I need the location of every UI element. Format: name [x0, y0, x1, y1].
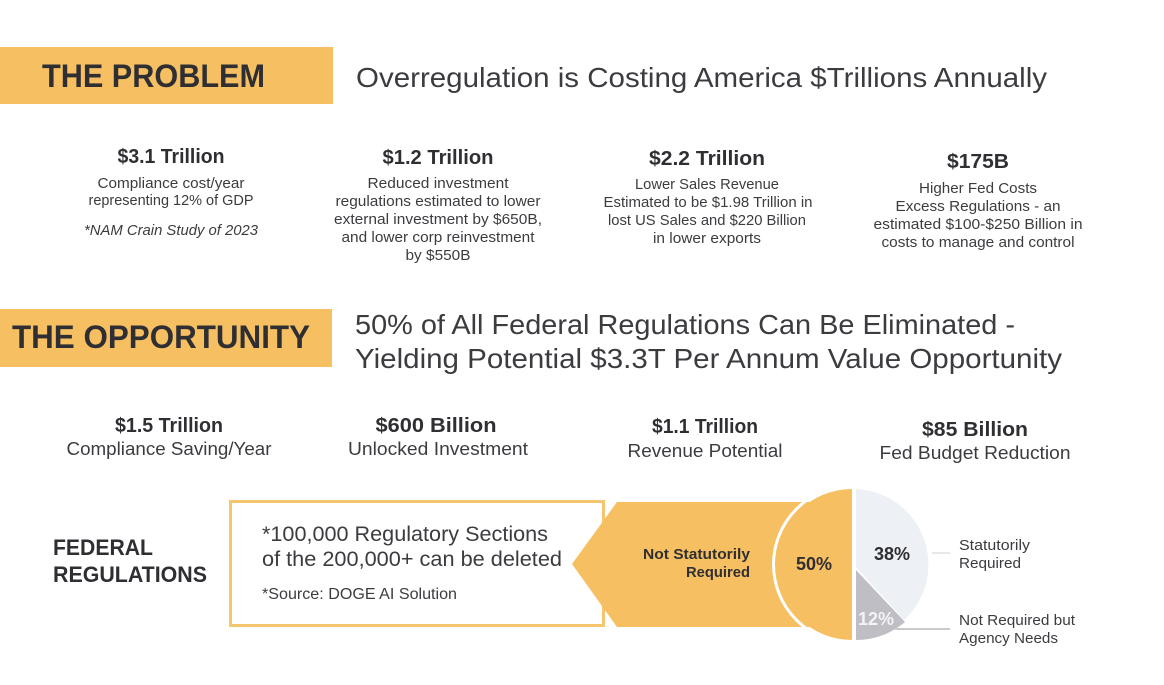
- stat: 2.2 trillion: Estimated to be $1.98 Trillion in: [604, 195, 812, 211]
- legend: statutorily required: [932, 538, 1031, 572]
- stat: unlocked investment: $600 Billion: [376, 415, 496, 437]
- arrow: not statutorily required: Not Statutorily: [643, 547, 750, 563]
- stat: 3.1 trillion: *NAM Crain Study of 2023: [84, 223, 258, 239]
- pie slice: 38 percent: [856, 489, 928, 620]
- arrow: not statutorily required: [572, 502, 810, 627]
- callout: regulatory sections: *Source: DOGE AI Solution: [262, 586, 457, 603]
- stat: revenue potential: $1.1 Trillion: [652, 416, 758, 438]
- stat: revenue potential: [628, 416, 782, 461]
- stat: compliance saving: [66, 415, 272, 459]
- banner: the opportunity: [0, 309, 332, 367]
- stat: 3.1 trillion: representing 12% of GDP: [88, 193, 254, 209]
- panel: opportunity statistics: [66, 415, 1070, 463]
- heading: opportunity: 50% of All Federal Regulations Can Be Eliminated -: [355, 309, 1015, 340]
- callout: regulatory sections: *100,000 Regulatory Sections: [262, 523, 548, 546]
- pie slice: 50 percent: 50%: [796, 554, 832, 574]
- pie slice: 12 percent: 12%: [858, 609, 894, 629]
- stat: fed budget reduction: Fed Budget Reduction: [880, 443, 1070, 463]
- stat: 1.2 trillion: [334, 147, 542, 264]
- heading: overregulation: Overregulation is Costing America $Trillions Annually: [356, 62, 1047, 93]
- stat: 3.1 trillion: $3.1 Trillion: [118, 146, 224, 168]
- callout: regulatory sections: of the 200,000+ can be deleted: [262, 548, 562, 571]
- stat: 1.2 trillion: by $550B: [406, 248, 470, 264]
- pie chart: regulation breakdown: [774, 486, 928, 643]
- stat: 2.2 trillion: lost US Sales and $220 Billion: [608, 213, 806, 229]
- callout: regulatory sections: [230, 502, 604, 626]
- stat: 2.2 trillion: [604, 148, 812, 247]
- heading: opportunity: [355, 309, 1062, 374]
- stat: 3.1 trillion: [84, 146, 258, 239]
- stat: compliance saving: Compliance Saving/Year: [66, 439, 272, 459]
- heading: federal regulations: REGULATIONS: [53, 562, 207, 587]
- banner: the opportunity: THE OPPORTUNITY: [12, 319, 310, 355]
- legend: not required but agency needs: [895, 613, 1075, 647]
- stat: 1.2 trillion: regulations estimated to lower: [336, 194, 541, 210]
- panel: problem statistics: [84, 146, 1082, 264]
- arrow: not statutorily required: Required: [686, 565, 750, 581]
- banner: the problem: [0, 47, 333, 104]
- panel: the opportunity header: [0, 309, 1062, 374]
- stat: 175B: estimated $100-$250 Billion in: [874, 217, 1082, 233]
- panel: the problem header: [0, 47, 1047, 104]
- pie slice: 12 percent: [856, 570, 905, 640]
- stat: unlocked investment: Unlocked Investment: [348, 439, 528, 459]
- heading: federal regulations: [53, 535, 207, 587]
- stat: 175B: $175B: [947, 151, 1009, 173]
- pie slice: 38 percent: 38%: [874, 544, 910, 564]
- stat: 3.1 trillion: Compliance cost/year: [98, 176, 245, 192]
- stat: fed budget reduction: [880, 419, 1070, 463]
- stat: fed budget reduction: $85 Billion: [922, 419, 1028, 441]
- legend: statutorily required: Required: [959, 556, 1021, 572]
- legend: not required but agency needs: Not Required but: [959, 613, 1075, 629]
- stat: unlocked investment: [348, 415, 528, 459]
- stat: 175B: Higher Fed Costs: [919, 181, 1037, 197]
- heading: opportunity: Yielding Potential $3.3T Per Annum Value Opportunity: [355, 343, 1062, 374]
- stat: 2.2 trillion: Lower Sales Revenue: [635, 177, 779, 193]
- stat: revenue potential: Revenue Potential: [628, 441, 782, 461]
- stat: 1.2 trillion: external investment by $650B,: [334, 212, 542, 228]
- stat: 175B: costs to manage and control: [882, 235, 1074, 251]
- stat: 1.2 trillion: Reduced investment: [368, 176, 508, 192]
- stat: compliance saving: $1.5 Trillion: [115, 415, 223, 437]
- stat: 175B: Excess Regulations - an: [896, 199, 1060, 215]
- stat: 175B: [874, 151, 1082, 251]
- banner: the problem: THE PROBLEM: [42, 58, 265, 94]
- legend: not required but agency needs: Agency Needs: [959, 631, 1058, 647]
- stat: 1.2 trillion: $1.2 Trillion: [382, 147, 494, 169]
- pie slice: 50 percent: [774, 486, 852, 643]
- legend: statutorily required: Statutorily: [959, 538, 1031, 554]
- heading: federal regulations: FEDERAL: [53, 535, 153, 560]
- stat: 1.2 trillion: and lower corp reinvestment: [342, 230, 534, 246]
- stat: 2.2 trillion: in lower exports: [653, 231, 761, 247]
- stat: 2.2 trillion: $2.2 Trillion: [649, 148, 765, 170]
